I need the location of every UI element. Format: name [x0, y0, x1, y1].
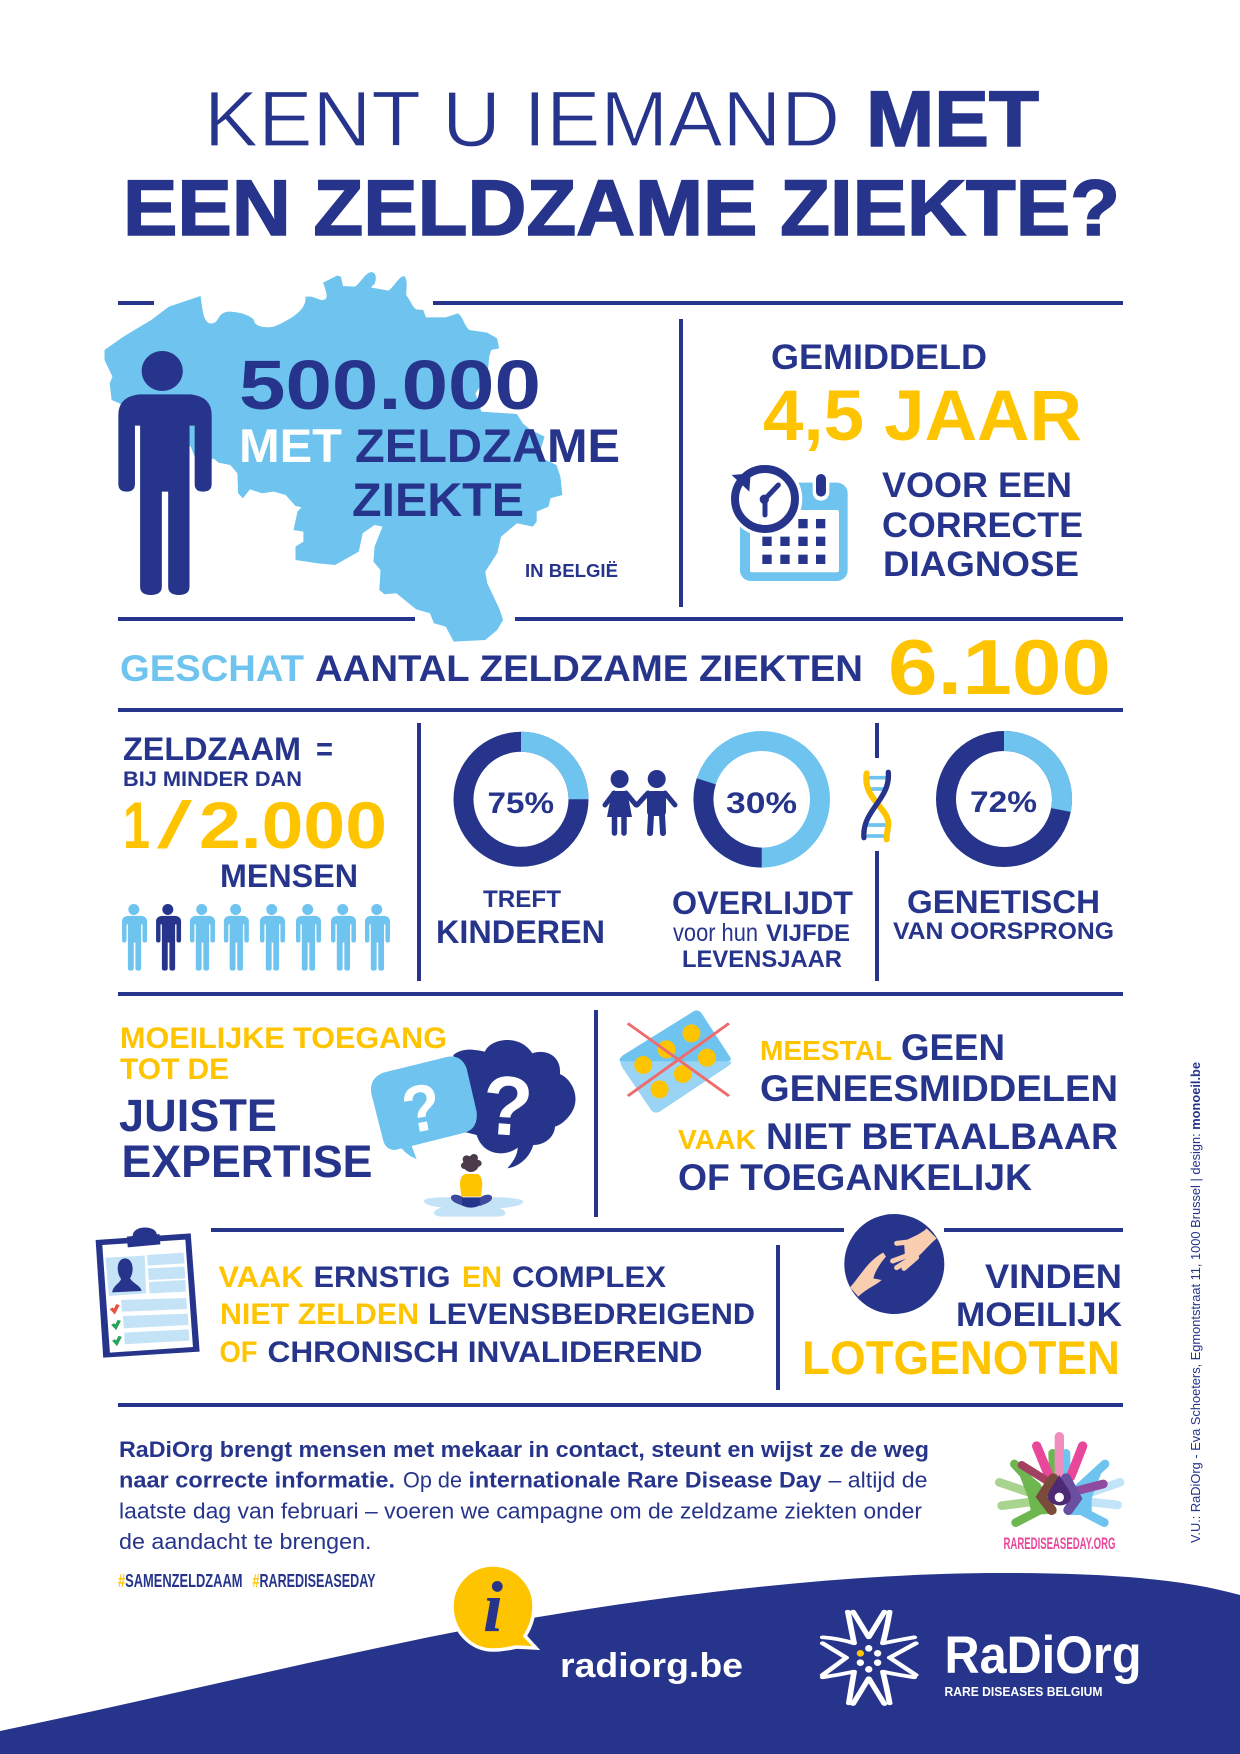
- label: overlijdt voor hun vijfde levensjaar: [672, 885, 853, 973]
- title: EEN ZELDZAME ZIEKTE?: [123, 163, 1120, 252]
- text: vinden moeilijk lotgenoten: LOTGENOTEN: [802, 1331, 1120, 1384]
- chart: donut 72%: [946, 741, 1062, 857]
- title: [123, 74, 1120, 252]
- panel: severe and complex: [96, 1228, 755, 1369]
- text: of chronisch invaliderend: OF: [220, 1336, 258, 1369]
- text: vaak ernstig en complex: [218, 1261, 666, 1294]
- text: vinden moeilijk lotgenoten: VINDEN: [985, 1258, 1122, 1296]
- text block: RaDiOrg description: de aandacht te brengen.: [119, 1529, 372, 1554]
- tagline: RARE DISEASES BELGIUM: [944, 1684, 1102, 1699]
- label: in België: IN BELGIË: [525, 561, 618, 581]
- label: met zeldzame ziekte: ZIEKTE: [352, 473, 524, 526]
- heading: gemiddeld: GEMIDDELD: [771, 338, 987, 377]
- icon: crossed out blister pack: [620, 1010, 731, 1113]
- label: voor een correcte diagnose: CORRECTE: [882, 506, 1083, 545]
- text: vinden moeilijk lotgenoten: MOEILIJK: [956, 1296, 1122, 1334]
- number: 1/2.000: [123, 788, 387, 862]
- label: geschat aantal: AANTAL ZELDZAME ZIEKTEN: [315, 648, 863, 689]
- icon: light speech bubble: [371, 1056, 477, 1159]
- panel: 500.000 people in Belgium: [105, 272, 620, 642]
- label: geschat aantal: GESCHAT: [120, 648, 304, 689]
- label: vaak niet betaalbaar of toegankelijk: VAAK: [678, 1124, 756, 1155]
- label: moeilijke toegang tot de: TOT DE: [120, 1053, 229, 1086]
- icon: DNA helix: [864, 772, 888, 839]
- text: of chronisch invaliderend: CHRONISCH INVALIDEREND: [268, 1336, 702, 1369]
- logo: RaDiOrg: [823, 1612, 1142, 1704]
- label: voor een correcte diagnose: [882, 466, 1083, 584]
- chart: donut 30%: [703, 741, 820, 858]
- label: met zeldzame ziekte: ZELDZAME: [355, 419, 620, 472]
- hashtags: [118, 1571, 376, 1591]
- hashtags: #SAMENZELDZAAM: [118, 1571, 242, 1591]
- number: 1/2.000: 2.000: [199, 788, 387, 862]
- label: treft kinderen: [436, 886, 605, 950]
- icon: children holding hands: [605, 770, 675, 833]
- heading: juiste expertise: [119, 1090, 372, 1187]
- label: treft kinderen: KINDEREN: [436, 914, 605, 950]
- number: 4,5 jaar: 4,5 JAAR: [763, 377, 1082, 456]
- panel: diagnosis time: [728, 338, 1083, 584]
- label: meestal geen geneesmiddelen: MEESTAL: [760, 1035, 892, 1066]
- icon: info speech bubble: i: [483, 1567, 503, 1647]
- label: overlijdt voor hun vijfde levensjaar: OVERLIJDT: [672, 885, 853, 921]
- label: meestal geen geneesmiddelen: GEEN: [901, 1027, 1005, 1068]
- label: treft kinderen: TREFT: [483, 886, 561, 913]
- heading: zeldzaam: BIJ MINDER DAN: [123, 768, 302, 791]
- number: 1/2.000: /: [157, 788, 193, 862]
- label: genetisch van oorsprong: VAN OORSPRONG: [893, 918, 1114, 945]
- label: met zeldzame ziekte: [239, 419, 620, 526]
- text: niet zelden levensbedreigend: [220, 1298, 755, 1331]
- panel: access to expertise: [119, 1022, 576, 1217]
- icon: seated person: [424, 1154, 523, 1217]
- icon: clock and calendar: [728, 462, 848, 581]
- wordmark: RaDiOrg: [944, 1626, 1142, 1685]
- heading: juiste expertise: EXPERTISE: [122, 1136, 372, 1187]
- label: vaak niet betaalbaar of toegankelijk: NIET BETAALBAAR: [766, 1116, 1118, 1157]
- number: 500.000: 500.000: [239, 346, 541, 424]
- label: vaak niet betaalbaar of toegankelijk: OF TOEGANKELIJK: [678, 1157, 1032, 1198]
- icon: dark thought cloud: [453, 1040, 576, 1168]
- text block: RaDiOrg description: RaDiOrg brengt mensen met mekaar in contact, steunt en wijst ze de weg: [119, 1437, 929, 1462]
- logo: Rare Disease Day: RAREDISEASEDAY.ORG: [1004, 1534, 1116, 1553]
- heading: juiste expertise: JUISTE: [119, 1090, 277, 1141]
- icon: clipboard: [96, 1228, 200, 1358]
- text: vaak ernstig en complex: VAAK: [218, 1261, 304, 1294]
- text block: RaDiOrg description: naar correcte informatie.: [119, 1468, 395, 1492]
- icon: reaching hands: [844, 1214, 944, 1314]
- panel: children 75%: [436, 742, 675, 950]
- label: meestal geen geneesmiddelen: GENEESMIDDELEN: [760, 1068, 1118, 1109]
- label: voor een correcte diagnose: VOOR EEN: [882, 466, 1072, 505]
- heading: zeldzaam: =: [316, 731, 333, 767]
- map of Belgium: [105, 272, 562, 642]
- icon: dark thought cloud: ?: [479, 1057, 536, 1155]
- chart: donut 75%: [464, 742, 578, 857]
- logo mark: star: [823, 1612, 916, 1704]
- text block: RaDiOrg description: laatste dag van februari – voeren we campagne om de zeldzame ziekten onder: [119, 1498, 923, 1524]
- label: genetisch van oorsprong: GENETISCH: [907, 884, 1100, 920]
- link: radiorg.be: radiorg.be: [560, 1647, 743, 1685]
- hashtags: #RAREDISEASEDAY: [252, 1571, 376, 1591]
- panel: fellow patients: [802, 1214, 1122, 1384]
- panel: definition of rare: [122, 731, 390, 971]
- label: moeilijke toegang tot de: MOEILIJKE TOEGANG: [120, 1022, 447, 1055]
- chart: donut 72%: 72%: [970, 786, 1037, 819]
- label: moeilijke toegang tot de: [120, 1022, 447, 1086]
- label: mensen: MENSEN: [220, 858, 358, 894]
- text: vaak ernstig en complex: ERNSTIG: [314, 1261, 450, 1294]
- heading: zeldzaam: [123, 731, 333, 791]
- text: niet zelden levensbedreigend: LEVENSBEDREIGEND: [428, 1298, 755, 1331]
- icon: person: [118, 351, 212, 595]
- label: met zeldzame ziekte: MET: [239, 419, 342, 472]
- text: vaak ernstig en complex: COMPLEX: [512, 1261, 666, 1294]
- icon: info speech bubble: [452, 1565, 536, 1650]
- label: overlijdt voor hun vijfde levensjaar: LEVENSJAAR: [682, 946, 842, 973]
- label: voor een correcte diagnose: DIAGNOSE: [883, 545, 1079, 584]
- label: meestal geen geneesmiddelen: [760, 1027, 1118, 1109]
- title: MET: [866, 74, 1039, 163]
- chart: donut 30%: 30%: [726, 787, 797, 820]
- logo: Rare Disease Day: [999, 1437, 1120, 1553]
- number: 6.100: 6.100: [888, 623, 1111, 711]
- panel: mortality 30%: [672, 741, 853, 973]
- text: niet zelden levensbedreigend: NIET ZELDEN: [220, 1298, 419, 1331]
- label: overlijdt voor hun vijfde levensjaar: voor hun: [673, 919, 758, 947]
- label: vaak niet betaalbaar of toegankelijk: [678, 1116, 1118, 1198]
- text: vaak ernstig en complex: EN: [462, 1261, 502, 1294]
- label: overlijdt voor hun vijfde levensjaar: VIJFDE: [766, 920, 850, 947]
- icon row: people: [122, 904, 390, 971]
- credit line: V.U.: RaDiOrg - Eva Schoeters, Egmontstraat 11, 1000 Brussel | design: monoeil.be: [1188, 1062, 1203, 1543]
- panel: medicines: [620, 1010, 1118, 1198]
- panel: genetic 72%: [893, 741, 1114, 945]
- text block: RaDiOrg description: – altijd de: [828, 1468, 928, 1492]
- label: genetisch van oorsprong: [893, 884, 1114, 945]
- icon: light speech bubble: ?: [396, 1068, 447, 1148]
- text block: RaDiOrg description: Op de: [403, 1468, 462, 1492]
- heading: zeldzaam: ZELDZAAM: [123, 731, 301, 767]
- text: vinden moeilijk lotgenoten: [802, 1258, 1122, 1384]
- text block: RaDiOrg description: [119, 1437, 929, 1554]
- footer wave: [0, 1573, 1240, 1754]
- title: KENT U IEMAND: [204, 74, 840, 163]
- text block: RaDiOrg description: internationale Rare Disease Day: [468, 1468, 822, 1492]
- chart: donut 75%: 75%: [488, 787, 554, 820]
- panel: estimated number of rare diseases: [120, 623, 1111, 711]
- number: 1/2.000: 1: [123, 788, 150, 862]
